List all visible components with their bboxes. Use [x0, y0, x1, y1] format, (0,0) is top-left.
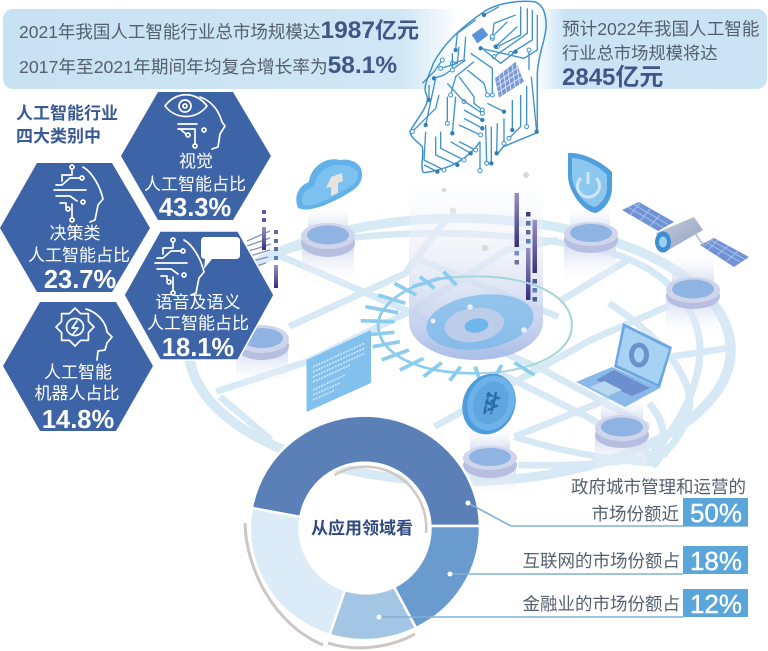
forecast text: 2845亿元: [562, 64, 663, 91]
icon: shield with power symbol: [568, 153, 612, 213]
callout: finance share: 金融业的市场份额占: [522, 594, 680, 614]
donut centre label: 从应用领域看: [311, 518, 413, 538]
segment: finance 12%: [330, 587, 416, 640]
icon: cloud upload: [296, 159, 362, 209]
eye disc: [423, 288, 537, 356]
icon: circuit head: [410, 1, 546, 173]
chip grid small: [472, 27, 488, 43]
panel: vision hexagon: 视觉: [179, 152, 213, 171]
segment: government 50%: [252, 416, 480, 526]
top banner: [3, 9, 767, 89]
icon: circuit head: [54, 165, 103, 222]
callout: government share: 50%: [690, 498, 742, 528]
callout: internet share: 18%: [690, 546, 742, 576]
icon: bitcoin coin: [453, 366, 525, 442]
purple data bars: [514, 193, 537, 302]
panel: robot hexagon: 人工智能: [44, 363, 112, 382]
donut shadow arc: [245, 523, 415, 648]
panel: decision hexagon: 人工智能占比: [28, 246, 130, 265]
title text line 2: 2017年至2021年期间年均复合增长率为58.1%: [19, 52, 397, 79]
panel: robot hexagon: [3, 302, 153, 434]
callout: finance share: 12%: [690, 589, 742, 619]
callout: internet share: [448, 546, 748, 576]
pedestal: shield: [564, 205, 618, 285]
background globe grid: [189, 218, 731, 482]
forecast text: [562, 19, 759, 91]
panel: robot hexagon: 14.8%: [42, 406, 114, 434]
icon: code screen: [306, 330, 371, 412]
pedestal: cloud: [301, 205, 355, 286]
callout: government share: 市场份额近: [592, 504, 679, 524]
panel: vision hexagon: 43.3%: [159, 194, 231, 222]
callout: internet share: 互联网的市场份额占: [522, 551, 680, 571]
icon: speech head: [155, 238, 204, 295]
panel: vision hexagon: [121, 92, 271, 222]
pedestal: coin: [463, 425, 517, 498]
left data bars and fan lines: [247, 210, 278, 288]
panel: speech hexagon: 18.1%: [162, 334, 234, 362]
segment: other: [250, 508, 345, 635]
icon: gear head: [56, 308, 112, 360]
heading: four categories: [16, 103, 118, 146]
segment: internet 18%: [394, 526, 480, 628]
callout: government share: [466, 477, 748, 528]
panel: decision hexagon: 23.7%: [44, 266, 116, 294]
callout: finance share: [376, 589, 748, 620]
chip grid large: [495, 62, 524, 98]
heading: four categories: 人工智能行业: [16, 103, 118, 123]
callout: government share: 政府城市管理和运营的: [571, 477, 746, 497]
panel: decision hexagon: 决策类: [50, 224, 100, 243]
central cylinder: [409, 172, 543, 360]
panel: decision hexagon: [0, 163, 150, 294]
icon: speech bubble: [201, 237, 240, 269]
panel: vision hexagon: 人工智能占比: [144, 175, 246, 194]
inner shadow: [334, 467, 426, 533]
icon: eye head: [165, 95, 225, 149]
icon: satellite: [622, 202, 749, 267]
title text line 1: 2021年我国人工智能行业总市场规模达1987亿元: [19, 17, 419, 44]
donut chart: [245, 416, 480, 648]
ring with ticks: [361, 272, 572, 381]
panel: speech hexagon: 语音及语义: [156, 293, 240, 312]
panel: speech hexagon: [124, 231, 274, 362]
heading: four categories: 四大类别中: [16, 127, 101, 146]
forecast text: 预计2022年我国人工智能: [562, 19, 759, 39]
panel: speech hexagon: 人工智能占比: [147, 314, 249, 333]
pedestal: laptop: [595, 395, 649, 474]
pedestal: satellite: [666, 250, 720, 340]
pedestal: left: [235, 325, 289, 390]
forecast text: 行业总市场规模将达: [562, 43, 718, 63]
panel: robot hexagon: 机器人占比: [34, 384, 120, 403]
icon: laptop: [576, 323, 672, 407]
